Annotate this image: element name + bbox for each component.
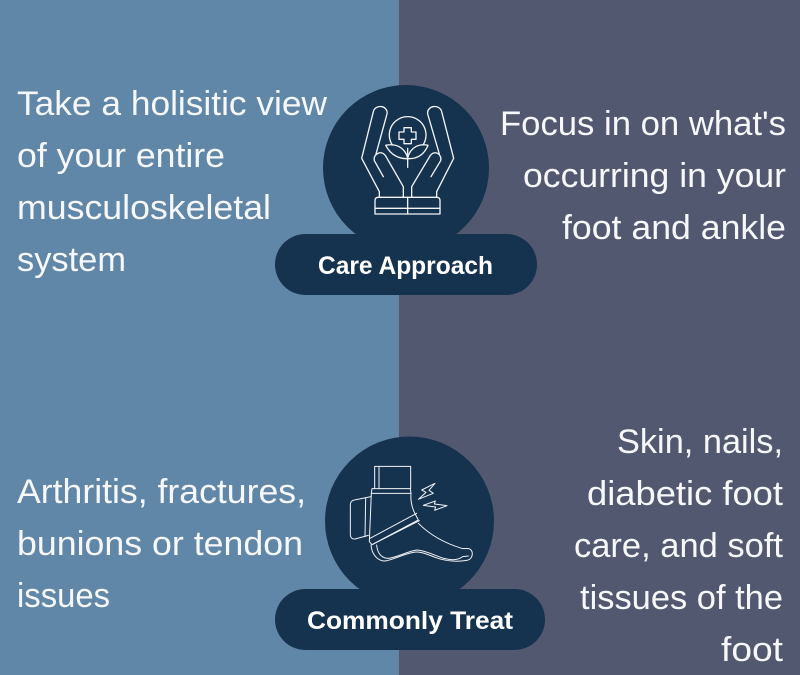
text: arthritis list: [17, 473, 306, 615]
text: skin and nails list: Skin, nails,: [617, 423, 783, 461]
text: skin and nails list: care, and soft: [574, 527, 784, 565]
text: arthritis list: Arthritis, fractures,: [17, 473, 306, 511]
text: foot and ankle focus: foot and ankle: [562, 209, 786, 247]
label pill: Care Approach: [275, 234, 537, 295]
label pill: Commonly Treat: Commonly Treat: [307, 607, 514, 635]
text: holistic view: [17, 85, 327, 279]
text: holistic view: Take a holisitic view: [17, 85, 327, 123]
text: foot and ankle focus: Focus in on what's: [500, 105, 786, 143]
text: arthritis list: issues: [17, 577, 110, 615]
text: skin and nails list: diabetic foot: [587, 475, 784, 513]
label pill: Care Approach: Care Approach: [318, 252, 493, 280]
text: skin and nails list: tissues of the: [580, 579, 783, 617]
text: skin and nails list: [574, 423, 784, 669]
text: holistic view: system: [17, 241, 126, 279]
text: holistic view: of your entire: [17, 137, 225, 175]
circle: commonly treat badge: [325, 436, 494, 606]
label pill: Commonly Treat: [275, 589, 545, 650]
panel: right background: [399, 0, 800, 675]
panel: left background: [0, 0, 399, 675]
text: skin and nails list: foot: [721, 631, 784, 669]
text: foot and ankle focus: occurring in your: [523, 157, 786, 195]
icon: hands holding plant with medical cross: [362, 107, 454, 214]
circle: care approach badge: [323, 85, 489, 251]
text: foot and ankle focus: [500, 105, 786, 247]
text: holistic view: musculoskeletal: [17, 189, 271, 227]
text: arthritis list: bunions or tendon: [17, 525, 303, 563]
icon: foot with ankle brace and pain bolts: [350, 466, 472, 561]
